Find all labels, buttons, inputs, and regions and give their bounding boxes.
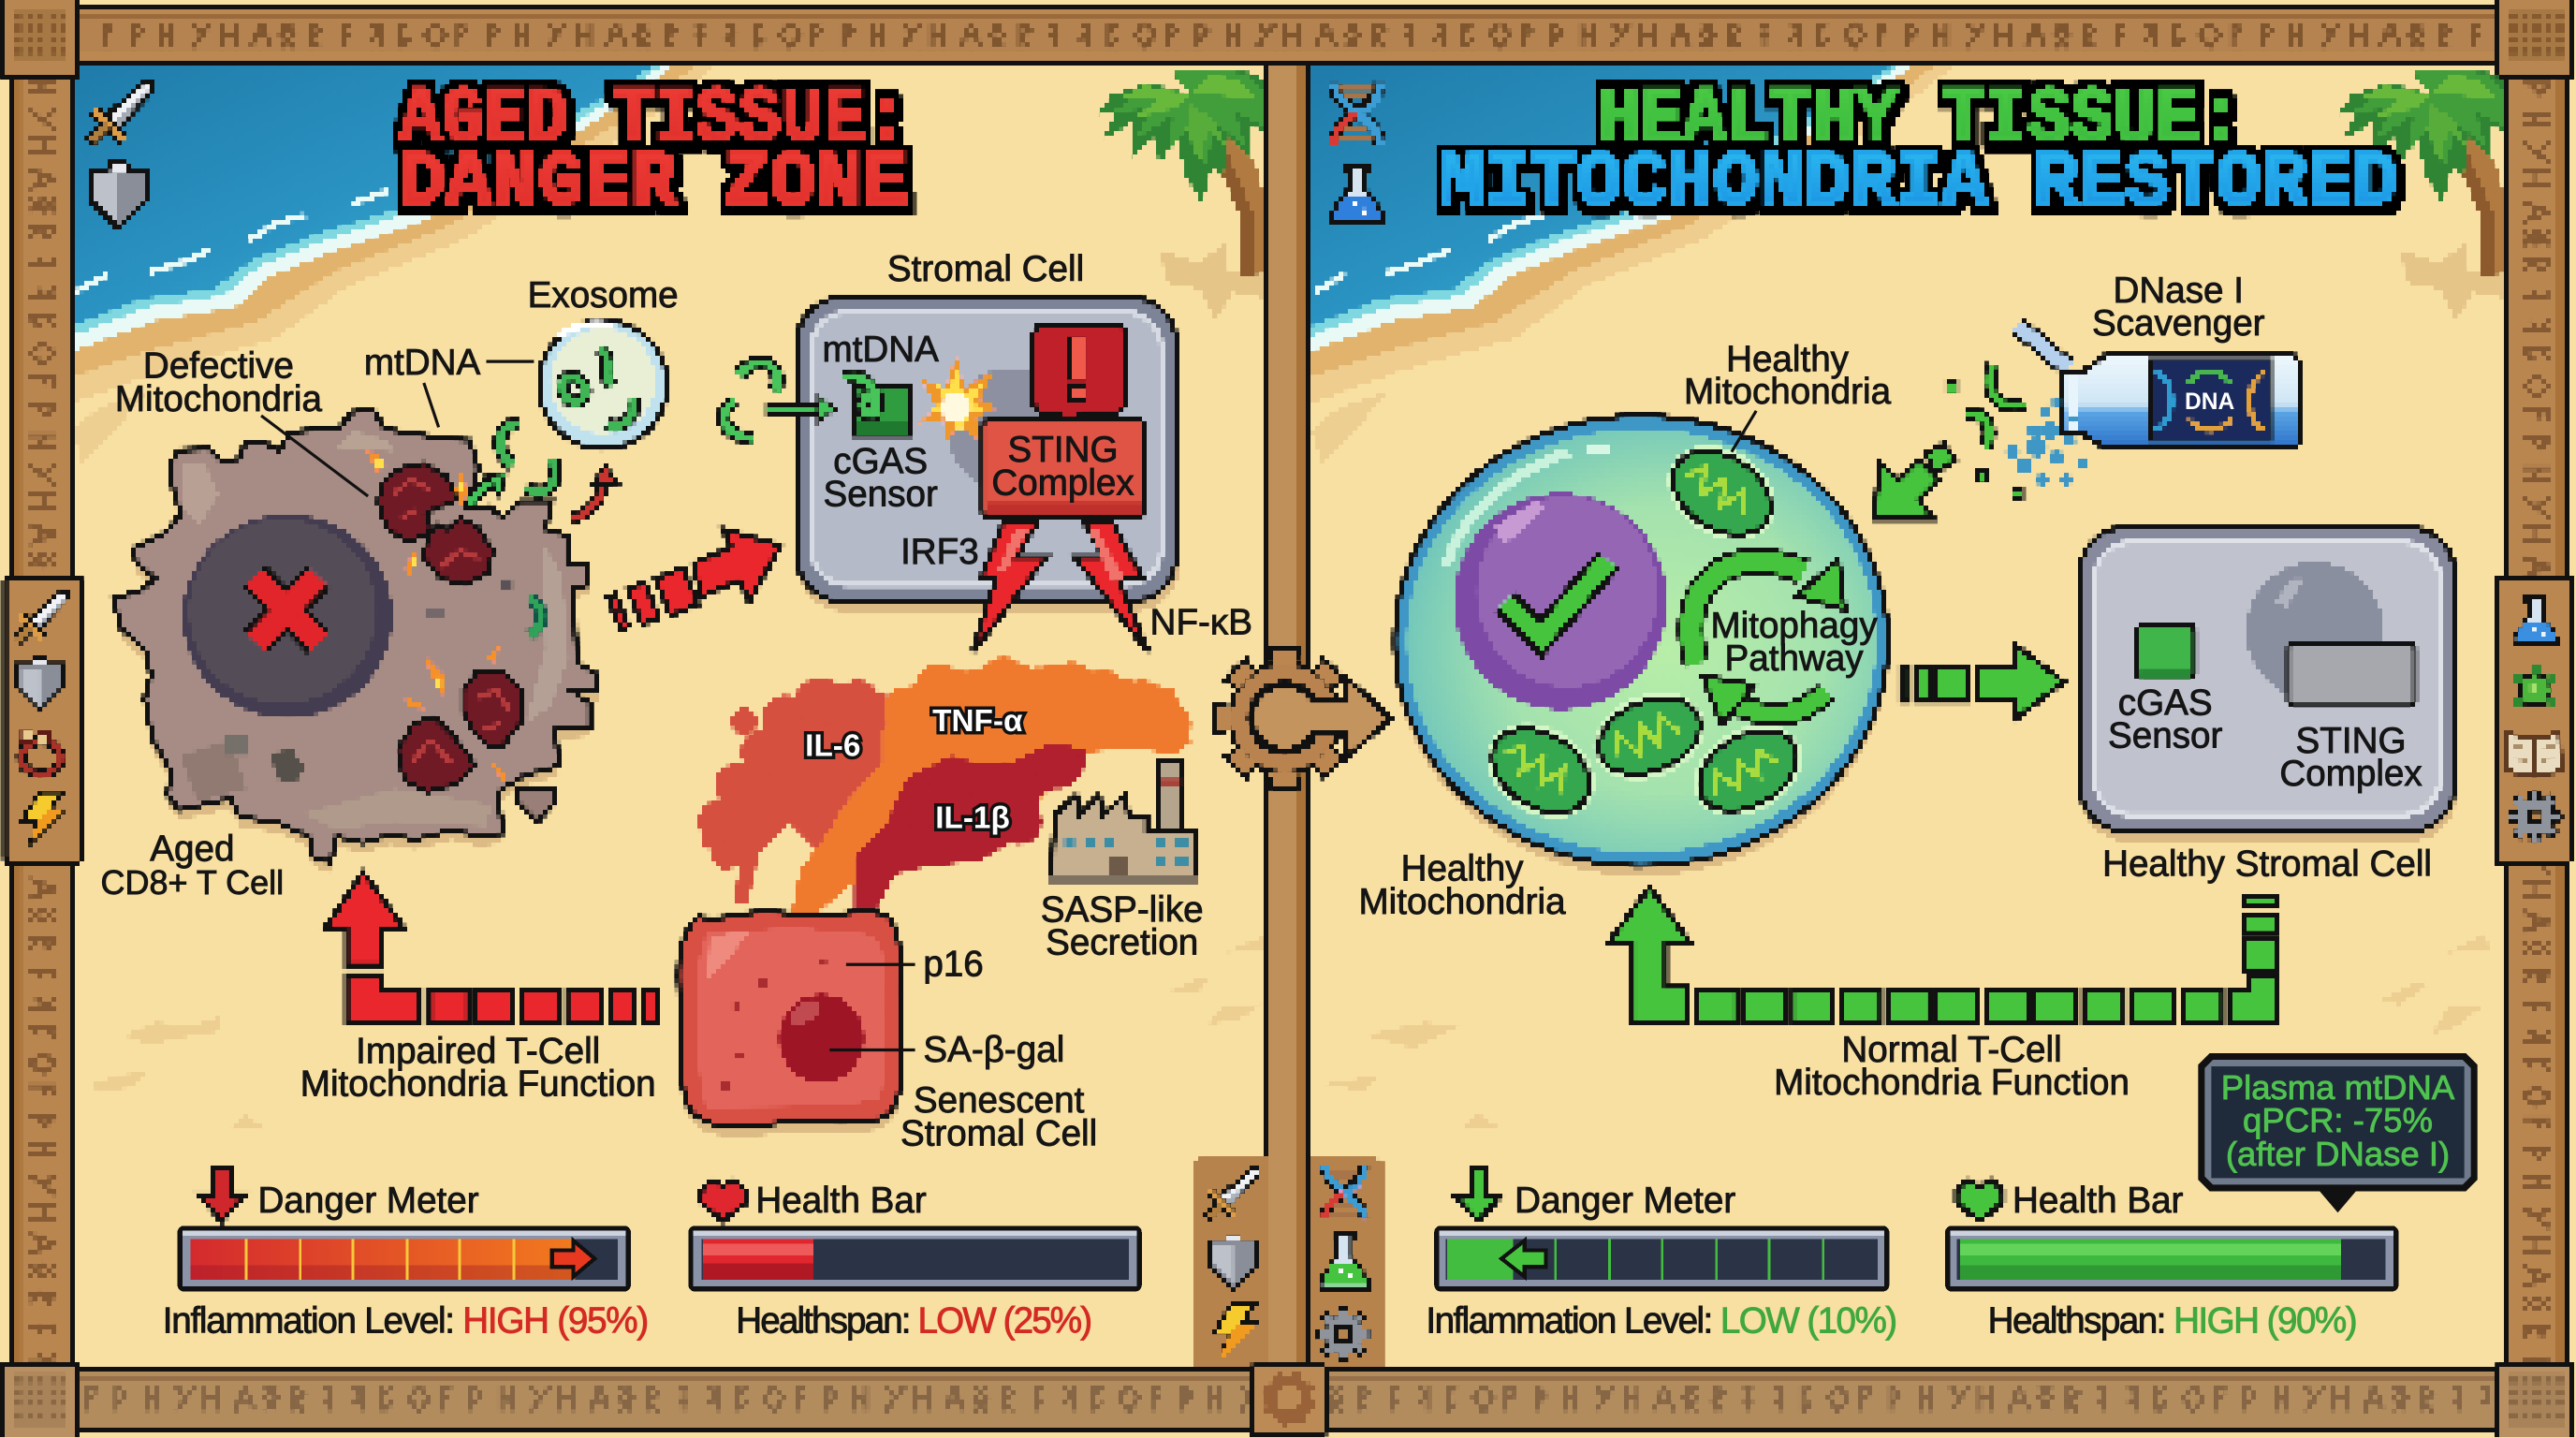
factory xyxy=(1048,759,1199,884)
arrow into cell xyxy=(766,396,835,422)
title: aged tissue danger zone: DANGER ZONE xyxy=(399,139,909,227)
label: cGAS sensor: Sensor xyxy=(2108,716,2223,756)
left-panel corner icon tray xyxy=(1194,1155,1266,1367)
leader lines and labels: aged panel xyxy=(101,249,1252,1341)
left side panel with icons xyxy=(5,577,80,862)
label: p16: p16 xyxy=(923,945,984,985)
label: normal T-cell mitochondria function: Normal T-Cell xyxy=(1841,1030,2062,1070)
label: IL-6: IL-6 xyxy=(805,728,860,763)
label: impaired T-cell mitochondria function: Mitochondria Function xyxy=(300,1064,656,1105)
icon: heart xyxy=(701,1180,746,1221)
label: exosome: Exosome xyxy=(528,275,679,315)
label: healthy mitochondria bottom: Mitochondria xyxy=(1359,882,1566,922)
leader lines and labels: healthy panel xyxy=(1359,271,2432,1341)
label: mitophagy pathway: Pathway xyxy=(1725,638,1864,679)
nucleus with X xyxy=(183,514,392,718)
callout: plasma mtDNA qPCR xyxy=(2198,1053,2478,1212)
icon: heart xyxy=(1956,1180,2002,1221)
SASP cytokine plumes xyxy=(698,657,1191,917)
label: DNA on bottle: DNA xyxy=(2185,389,2234,415)
label: aged CD8+ T cell: Aged xyxy=(150,829,234,870)
flames xyxy=(365,447,506,782)
healthy mitochondria xyxy=(1470,426,1819,837)
readout: inflammation level low: Inflammation Level: LOW (10%) xyxy=(1426,1300,1897,1341)
senescent stromal cell xyxy=(679,912,901,1137)
nucleus with check xyxy=(1454,493,1667,710)
stromal cell xyxy=(724,298,1179,653)
label: healthy mitochondria top: Mitochondria xyxy=(1684,372,1892,412)
danger meter bar xyxy=(178,1225,631,1292)
label: danger meter: Danger Meter xyxy=(1515,1181,1735,1221)
right-panel corner icon tray xyxy=(1310,1155,1383,1367)
icon: sword xyxy=(91,81,154,142)
label: cGAS sensor: cGAS xyxy=(2118,682,2213,723)
label: DNase I scavenger: DNase I xyxy=(2114,271,2244,311)
label: STING complex: STING xyxy=(2296,721,2407,761)
label: healthy stromal cell: Healthy Stromal Cell xyxy=(2102,844,2432,884)
top rune bar xyxy=(66,5,2513,67)
bottle body xyxy=(2060,355,2302,448)
nucleus xyxy=(2246,562,2384,700)
danger meter bar (healthy) xyxy=(1434,1225,1889,1292)
label: defective mitochondria: Mitochondria xyxy=(115,379,322,419)
panel: healthy tissue mitochondria restored xyxy=(1331,75,2478,1341)
panel: aged tissue danger zone xyxy=(91,75,1252,1341)
cGAS sensor with mtDNA xyxy=(844,376,910,435)
label: TNF-alpha: TNF-α xyxy=(932,704,1023,739)
readout: inflammation level high: Inflammation Level: HIGH (95%) xyxy=(163,1300,649,1341)
label: IRF3: IRF3 xyxy=(900,532,979,572)
red dashed arrow to stromal cell xyxy=(607,529,781,629)
icon: green flask xyxy=(1321,1234,1368,1288)
STING complex block xyxy=(2289,644,2415,707)
icon: DNA xyxy=(1325,1167,1364,1219)
icon: blue flask xyxy=(1331,165,1383,224)
icon: gear xyxy=(1317,1307,1370,1361)
title: healthy tissue mitochondria restored: HEALTHY TISSUE: xyxy=(1597,75,2243,163)
label: health bar: Health Bar xyxy=(2012,1181,2184,1221)
nucleus shadow xyxy=(948,368,1073,493)
healthy T cell xyxy=(1395,416,1888,875)
DNA helix on label xyxy=(2156,372,2265,431)
label: SA-beta-gal: SA-β-gal xyxy=(923,1030,1064,1070)
lightning right: NF-kB xyxy=(1075,521,1149,653)
label: healthy mitochondria bottom: Healthy xyxy=(1401,849,1523,889)
mitophagy pathway arrows xyxy=(1691,559,1845,725)
label: cGAS sensor: Sensor xyxy=(824,475,938,515)
left rune column xyxy=(10,66,74,1372)
label: DNase I scavenger: Scavenger xyxy=(2092,303,2265,344)
divider xyxy=(1265,63,1311,1377)
leader line xyxy=(1732,411,1756,452)
STING complex xyxy=(983,420,1145,516)
aged CD8+ T cell xyxy=(113,409,598,873)
label: aged CD8+ T cell: CD8+ T Cell xyxy=(101,863,284,902)
label: senescent stromal cell: Senescent xyxy=(914,1080,1084,1121)
health bar (aged) xyxy=(688,1225,1142,1292)
alert sign xyxy=(1033,326,1127,429)
label: IL-1beta: IL-1β xyxy=(935,801,1010,836)
dropper xyxy=(2017,326,2069,368)
callout text: qPCR: -75% xyxy=(2243,1101,2433,1139)
icon: lightning xyxy=(22,792,65,845)
label: STING complex: Complex xyxy=(2279,754,2422,794)
bottom rune bar xyxy=(66,1367,2513,1431)
title: aged tissue danger zone: AGED TISSUE: xyxy=(399,75,909,163)
centre gear with arrow xyxy=(1209,643,1390,793)
mtDNA fragments cleared xyxy=(1967,365,2024,447)
green arrow to stromal cell xyxy=(1901,644,2063,720)
icon: danger down arrow xyxy=(198,1168,245,1221)
label: SASP-like secretion: SASP-like xyxy=(1041,890,1204,931)
bottom centre gear block xyxy=(1251,1364,1325,1436)
right side panel with icons xyxy=(2496,577,2571,862)
icon: sword xyxy=(1207,1167,1261,1219)
DNase I scavenger bottle xyxy=(1947,326,2302,500)
right rune column xyxy=(2504,66,2568,1372)
TNF-alpha plume xyxy=(792,657,1191,917)
icon: DNA xyxy=(1334,82,1380,144)
bottle label xyxy=(2150,360,2271,440)
external mtDNA fragments xyxy=(724,362,778,439)
label: mitophagy pathway: Mitophagy xyxy=(1710,606,1878,646)
icon: open book xyxy=(2507,733,2561,777)
icon: green microbe xyxy=(2513,666,2556,708)
red L-shaped arrow to T cell xyxy=(326,873,657,1023)
label: impaired T-cell mitochondria function: Impaired T-Cell xyxy=(356,1032,600,1072)
label: defective mitochondria: Defective xyxy=(143,346,294,387)
icon: danger down arrow xyxy=(1454,1168,1501,1221)
explosion xyxy=(918,355,999,444)
green L-shaped arrow to T cell xyxy=(1608,888,2277,1023)
label: mtDNA: mtDNA xyxy=(364,343,481,383)
icon: blue flask xyxy=(2514,595,2557,644)
IL-1beta plume xyxy=(855,742,1088,912)
icon: shield xyxy=(91,163,146,228)
green arrow toward cell xyxy=(1875,444,1955,520)
readout: healthspan low: Healthspan: LOW (25%) xyxy=(736,1300,1092,1341)
label: senescent stromal cell: Stromal Cell xyxy=(900,1113,1097,1153)
label: mtDNA in cell: mtDNA xyxy=(823,330,939,370)
healthy stromal cell xyxy=(2080,527,2456,842)
cGAS sensor xyxy=(2137,626,2195,679)
icon: shield xyxy=(1210,1236,1256,1289)
released mtDNA fragments and arrows xyxy=(470,424,605,636)
title: aged tissue danger zone xyxy=(399,75,909,227)
icon: inflamed ring xyxy=(20,729,61,774)
callout text: Plasma mtDNA xyxy=(2221,1068,2454,1107)
nucleus xyxy=(779,994,864,1083)
health bar (healthy) xyxy=(1945,1225,2398,1292)
callout text: (after DNase I) xyxy=(2226,1135,2450,1173)
label: STING complex: STING xyxy=(1008,430,1119,470)
readout: healthspan high: Healthspan: HIGH (90%) xyxy=(1988,1300,2358,1341)
icon: lightning xyxy=(1213,1304,1256,1359)
lightning left: IRF3 xyxy=(973,521,1046,653)
icon: shield xyxy=(18,658,62,712)
label: stromal cell: Stromal Cell xyxy=(887,249,1084,289)
title: healthy tissue mitochondria restored: MITOCHONDRIA RESTORED xyxy=(1439,139,2398,227)
label: normal T-cell mitochondria function: Mitochondria Function xyxy=(1774,1063,2130,1103)
IL-6 plume xyxy=(698,679,920,902)
defective mitochondria xyxy=(378,463,522,792)
icon: gear xyxy=(2508,790,2562,844)
exosome with mtDNA xyxy=(539,320,667,448)
label: health bar: Health Bar xyxy=(755,1181,927,1221)
scavenged particles xyxy=(2006,398,2088,486)
label: NF-kB: NF-κB xyxy=(1150,602,1252,642)
label: danger meter: Danger Meter xyxy=(258,1181,479,1221)
title: healthy tissue mitochondria restored xyxy=(1439,75,2398,227)
broken cell fragment xyxy=(518,790,555,822)
label: healthy mitochondria top: Healthy xyxy=(1726,340,1849,380)
leader lines xyxy=(261,361,915,1050)
label: STING complex: Complex xyxy=(991,462,1134,503)
icon: sword xyxy=(16,590,69,641)
label: cGAS sensor: cGAS xyxy=(833,441,928,481)
label: SASP-like secretion: Secretion xyxy=(1046,923,1198,963)
